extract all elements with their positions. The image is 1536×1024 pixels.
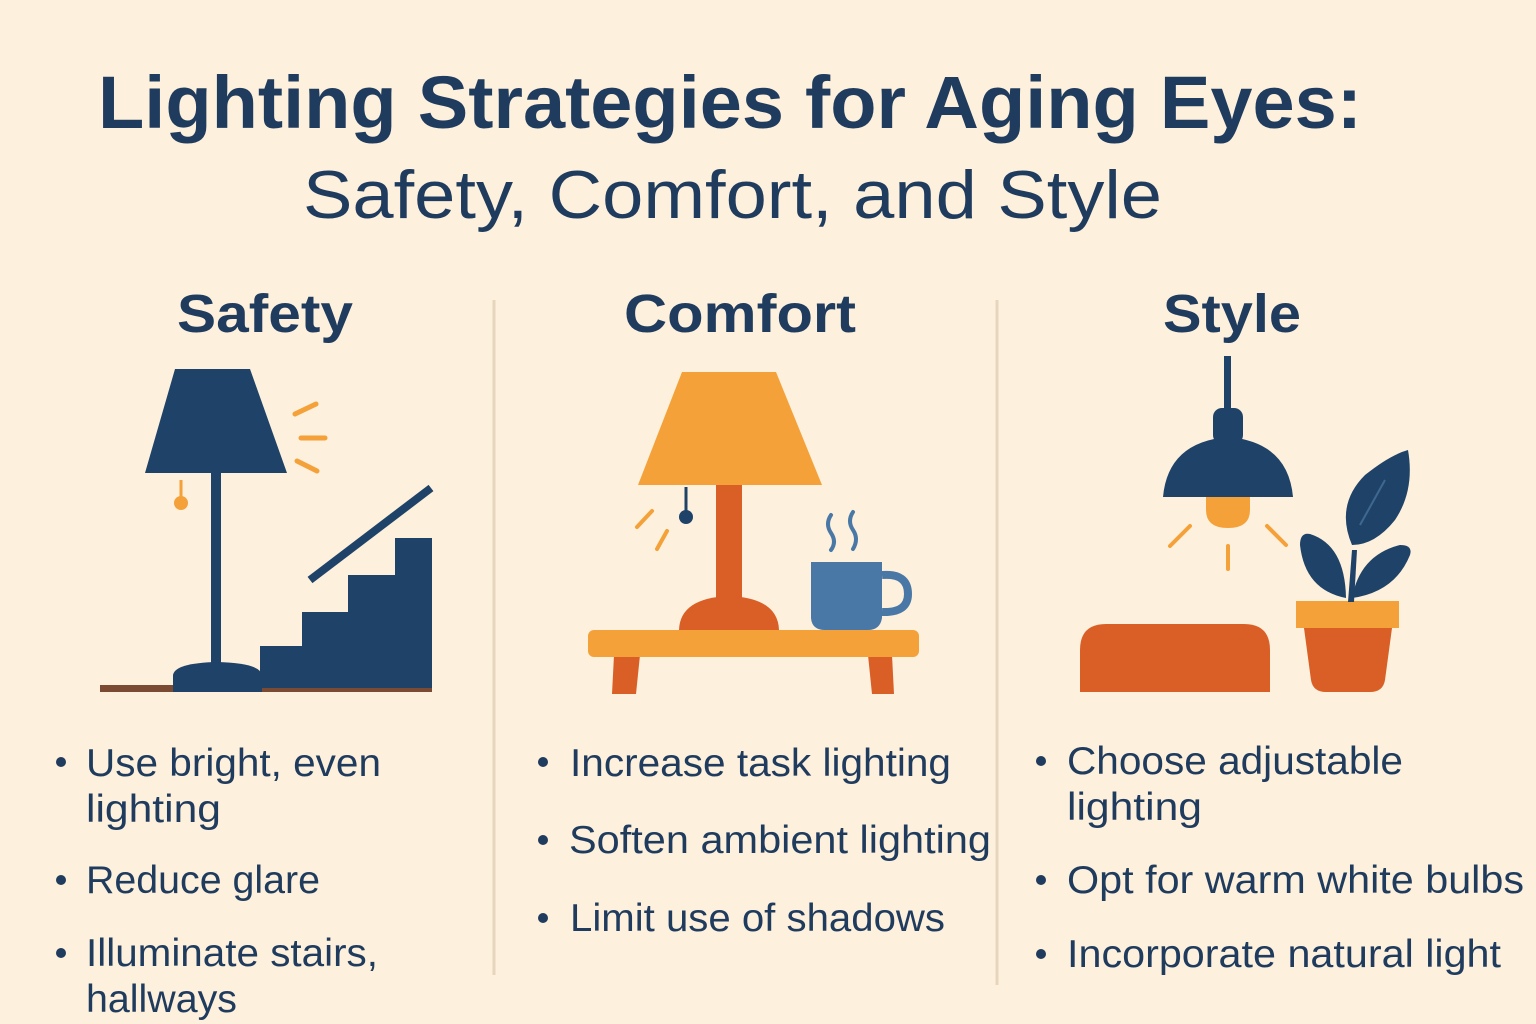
bullets: style: Incorporate natural light xyxy=(1067,933,1501,976)
panel: safety xyxy=(56,284,432,1021)
bullets: comfort: Increase task lighting xyxy=(570,742,951,785)
icon: floor lamp and stairs xyxy=(100,369,432,692)
heading: Comfort: Comfort xyxy=(624,284,856,344)
bullets: safety: lighting xyxy=(86,788,221,831)
icon: pendant lamp, sofa and plant xyxy=(1080,356,1411,692)
heading: Style: Style xyxy=(1163,284,1301,344)
bullets: safety: Reduce glare xyxy=(86,859,320,902)
heading: Safety: Safety xyxy=(177,284,353,344)
bullets: safety: Use bright, even xyxy=(86,742,381,785)
bullets: comfort: Limit use of shadows xyxy=(570,897,945,940)
panel: style xyxy=(1036,284,1524,976)
bullets: style: Opt for warm white bulbs xyxy=(1067,859,1524,902)
bullets: comfort xyxy=(538,742,991,940)
bullets: safety: hallways xyxy=(86,978,237,1021)
bullets: safety xyxy=(56,742,381,1021)
bullets: style xyxy=(1036,740,1524,976)
title xyxy=(98,61,1362,233)
bullets: style: lighting xyxy=(1067,786,1202,829)
panel: comfort xyxy=(538,284,991,940)
icon: table lamp and mug xyxy=(588,372,919,694)
bullets: safety: Illuminate stairs, xyxy=(86,932,378,975)
bullets: style: Choose adjustable xyxy=(1067,740,1403,783)
bullets: comfort: Soften ambient lighting xyxy=(569,819,991,862)
subtitle: Safety, Comfort, and Style xyxy=(303,157,1162,233)
title: Lighting Strategies for Aging Eyes: xyxy=(98,61,1362,144)
